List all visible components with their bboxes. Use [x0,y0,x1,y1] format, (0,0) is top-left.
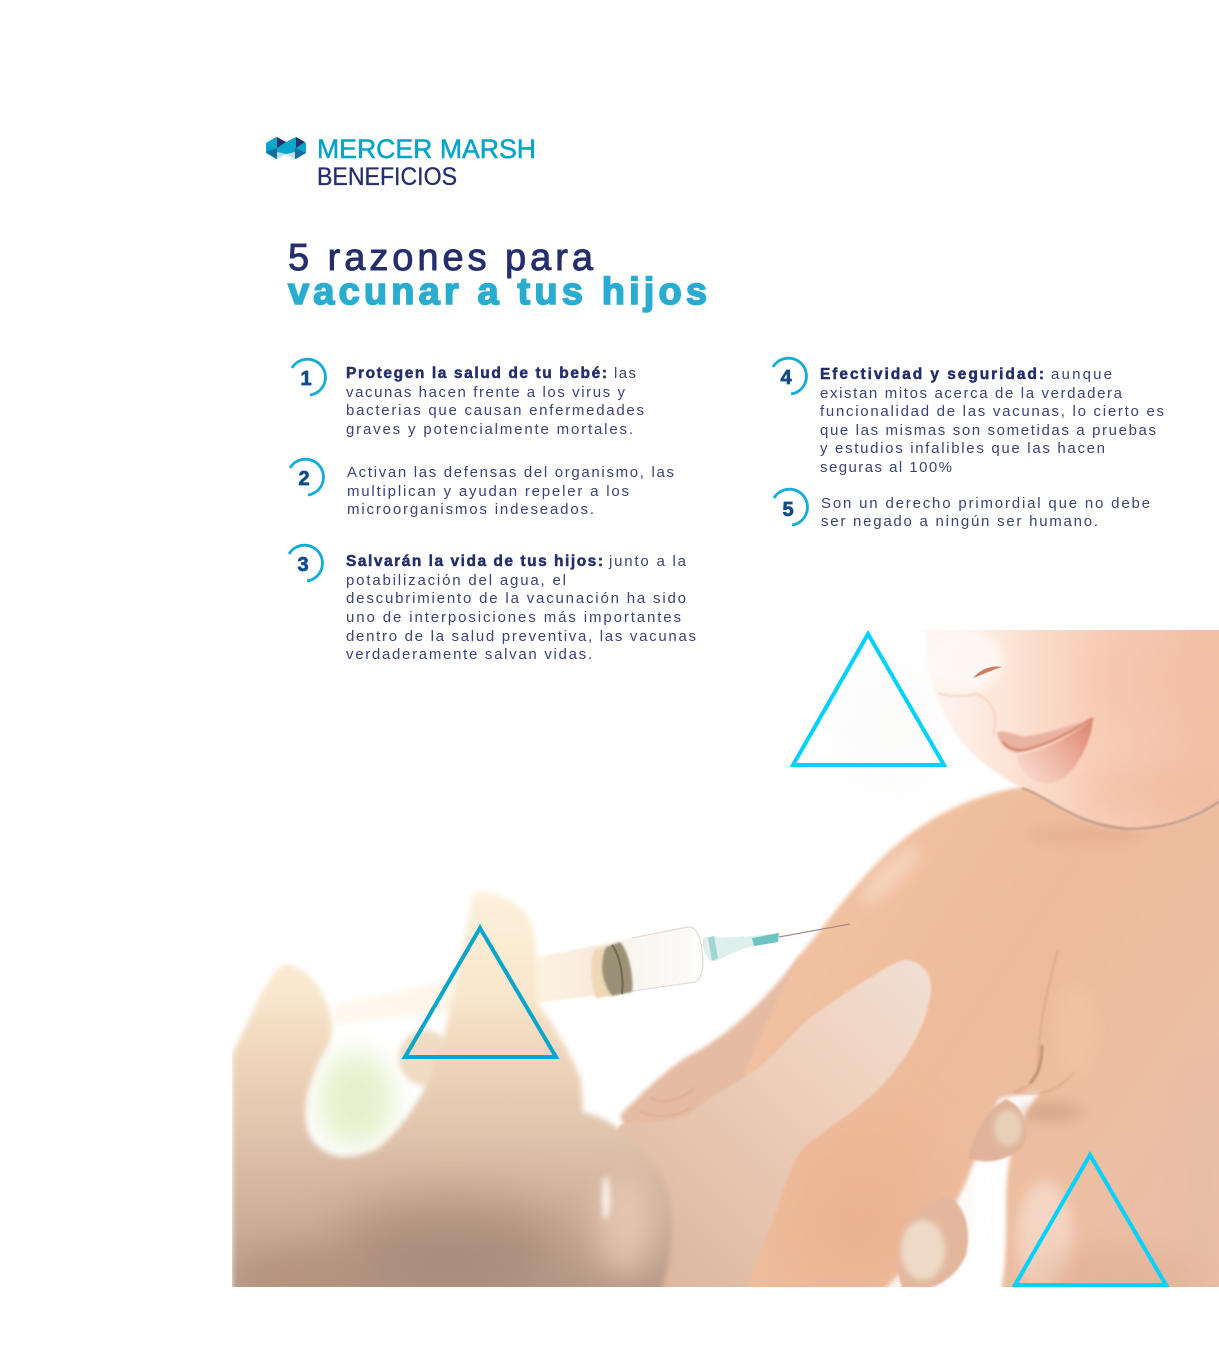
barrel [538,930,684,1003]
triangle outlines [405,634,1166,1285]
stopper [602,942,632,996]
text: reason 5: Son un derecho primordial que no debe [821,495,1150,512]
barrel outline [632,927,703,991]
gloved palm behind the arm [618,954,802,1126]
reason 3 [289,545,696,663]
syringe [334,924,850,1025]
text: reason 3: verdaderamente salvan vidas. [346,646,592,663]
nostril [973,667,1002,678]
icon: number 2 badge: 2 [298,468,310,490]
plunger rod [334,980,456,1024]
icon: number 1 badge [292,359,325,395]
baby shoulder and body [735,787,1219,1303]
baby face [925,625,1219,829]
text: reason 1: graves y potencialmente mortales. [346,421,633,438]
text: reason 4: seguras al 100% [820,459,952,476]
title line 1: 5 razones para [288,237,594,279]
triangle: top right [793,634,944,765]
logo wordmark: Mercer Marsh: MERCER MARSH [317,134,536,164]
needle hub [703,933,779,961]
reason 1 [292,359,644,438]
fingers under the arm [898,1099,1026,1291]
text: reason 3: uno de interposiciones más importantes [346,609,681,626]
text: reason 4: que las mismas son sometidas a pruebas [820,422,1156,439]
icon: logo mark [266,137,306,159]
photo: baby receiving a vaccine [232,625,1219,1303]
text: reason 1: vacunas hacen frente a los virus y [346,384,626,401]
text: reason 2 [347,464,674,518]
text: reason 1: las [614,365,636,382]
text: reason 4 [820,366,1164,476]
triangle: bottom right [1015,1155,1166,1285]
triangle: syringe [405,928,556,1057]
text: reason 4: aunque [1051,366,1112,383]
chin shadow [1022,788,1219,829]
text: reason 2: Activan las defensas del organismo, las [347,464,674,481]
icon: number 3 badge [289,545,322,581]
armpit crease [1015,950,1075,1094]
reason 5 [774,489,1150,530]
text: reason 4: Efectividad y seguridad: [820,366,1044,383]
text: reason 3: junto a la [608,553,687,570]
needle [779,924,850,937]
rear finger [399,1030,451,1086]
white gap between fingers [602,1176,610,1220]
green background highlight [318,1052,394,1148]
text: reason 1: bacterias que causan enfermedades [346,402,644,419]
text: reason 3 [346,553,696,663]
text: reason 4: funcionalidad de las vacunas, lo cierto es [820,403,1164,420]
reason 2 [290,459,674,518]
text: reason 3: descubrimiento de la vacunación ha sido [346,590,686,607]
text: reason 5: ser negado a ningún ser humano. [821,513,1098,530]
title [288,237,707,313]
logo wordmark: Beneficios: BENEFICIOS [317,163,457,191]
icon: number 1 badge: 1 [300,368,312,390]
text: reason 5 [821,495,1150,530]
lower lip [1017,718,1093,784]
text: reason 1: Protegen la salud de tu bebé: [346,365,607,382]
text: reason 3: Salvarán la vida de tus hijos: [346,553,603,570]
icon: number 3 badge: 3 [297,554,309,576]
text: reason 2: multiplican y ayudan repeler a los [347,483,629,500]
text: reason 1 [346,365,644,438]
blurred hand holding syringe [232,892,672,1300]
nose and philtrum [938,693,995,736]
stopper front [591,946,612,998]
upper lip [997,718,1093,753]
text: reason 3: potabilización del agua, el [346,572,566,589]
icon: number 5 badge: 5 [782,499,794,521]
logo: Mercer Marsh Beneficios [266,134,536,191]
text: reason 2: microorganismos indeseados. [347,501,594,518]
reason 4 [773,358,1164,476]
title line 2: vacunar a tus hijos [288,271,707,313]
gloved finger over the arm [600,960,931,1295]
text: reason 4: y estudios infalibles que las hacen [820,440,1105,457]
icon: number 2 badge [290,459,323,495]
icon: number 4 badge [773,358,806,394]
faint backdrop [830,660,950,800]
icon: number 5 badge [774,489,807,525]
text: reason 4: existan mitos acerca de la verdadera [820,385,1123,402]
text: reason 3: dentro de la salud preventiva, las vacunas [346,628,696,645]
icon: number 4 badge: 4 [780,367,792,389]
